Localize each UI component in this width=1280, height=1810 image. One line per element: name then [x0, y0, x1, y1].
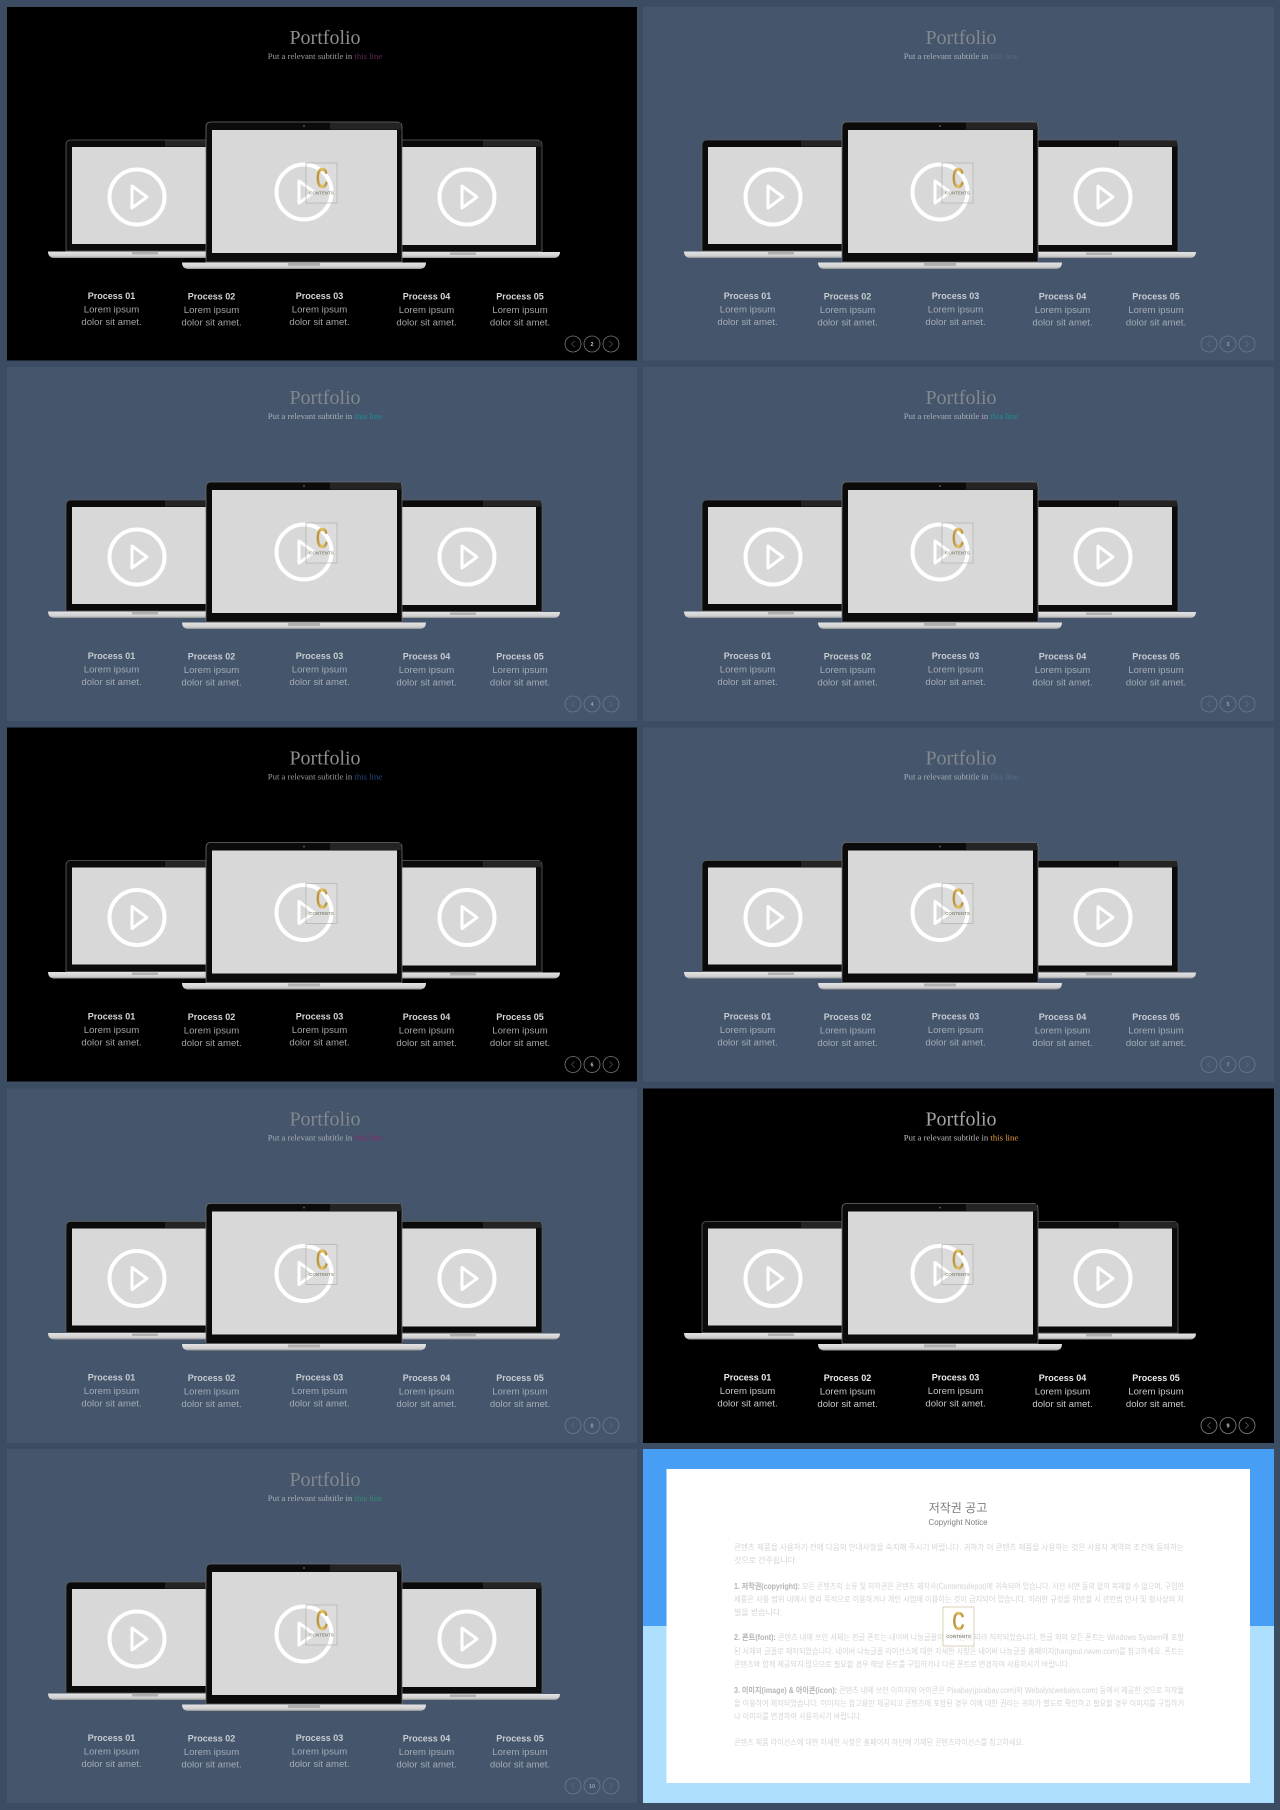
process labels: Lorem ipsum: [84, 1025, 139, 1036]
process labels: dolor sit amet.: [396, 1760, 457, 1770]
panel: slide 10: [7, 1449, 637, 1803]
process labels: Process 05: [496, 292, 544, 302]
subtitle: Put a relevant subtitle in this line: [904, 1132, 1018, 1142]
process labels: dolor sit amet.: [1032, 678, 1093, 688]
process labels: Lorem ipsum: [1035, 1026, 1090, 1036]
copyright body text: 콘텐츠와 함께 제공되지 않으므로 필요할 경우 해당 폰트를 구입하거나 다른 폰트로 변경하여 사용하시기 바랍니다.: [734, 1659, 1070, 1669]
process labels: Process 01: [88, 651, 135, 661]
panel: slide 7: [643, 728, 1274, 1082]
logo watermark: C: [952, 883, 964, 915]
panel: slide 4: [7, 367, 637, 721]
page navigation: [1201, 1056, 1255, 1072]
page navigation: 9: [1226, 1424, 1230, 1430]
process labels: Lorem ipsum: [1128, 1026, 1184, 1036]
logo watermark: [942, 1244, 973, 1284]
process labels: Process 03: [932, 291, 979, 301]
page navigation: 2: [590, 342, 594, 348]
page navigation: 8: [590, 1424, 594, 1430]
process labels: Process 05: [1132, 652, 1180, 662]
process labels: Lorem ipsum: [399, 1386, 454, 1398]
copyright body text: 콘텐츠 제품을 사용하기 전에 다음의 안내사항을 숙지해 주시기 바랍니다. 귀하가 이 콘텐츠 제품을 사용하는 것은 사용자 계약의 조건에 동의하는: [734, 1542, 1184, 1552]
process labels: Process 04: [403, 1012, 450, 1022]
process labels: Process 02: [188, 292, 235, 302]
process labels: Lorem ipsum: [399, 665, 454, 676]
subtitle: Put a relevant subtitle in this line: [268, 1493, 382, 1503]
process labels: Lorem ipsum: [184, 1386, 239, 1398]
logo watermark: [306, 1244, 337, 1284]
process labels: Process 05: [496, 1012, 544, 1022]
process labels: Process 03: [932, 1372, 979, 1382]
copyright heading: 저작권 공고: [929, 1501, 987, 1515]
process labels: Process 01: [724, 291, 771, 301]
subtitle: Put a relevant subtitle in this line: [904, 51, 1018, 61]
process labels: Lorem ipsum: [720, 1386, 775, 1397]
copyright body text: 을 이용하여 제작되었습니다. 이미지는 참고용만 제공되고 콘텐츠에 포함된 경우 이에 대한 권리는 귀하가 별도로 확인하고 필요할 경우 이미지를 구입하거: [734, 1698, 1184, 1708]
process labels: Process 03: [296, 1012, 343, 1022]
process labels: Lorem ipsum: [1128, 1386, 1184, 1398]
process labels: Lorem ipsum: [399, 1747, 454, 1758]
process labels: dolor sit amet.: [817, 318, 878, 328]
copyright body text: 콘텐츠 제품 라이선스에 대한 자세한 사항은 홈페이지 하단에 기재된 콘텐츠라이선스를 참고하세요.: [734, 1737, 1024, 1747]
logo watermark: C: [316, 1604, 328, 1636]
logo watermark: [306, 883, 337, 924]
copyright body text: 1. 저작권(copyright): 모든 콘텐츠의 소유 및 저작권은 콘텐츠 제작사(Contentsdepot)에 귀속되어 있습니다. 사전 서면 동의 없이 복제할 수 없으며, 구입한: [734, 1581, 1185, 1591]
panel: slide 2: [7, 7, 637, 360]
process labels: dolor sit amet.: [1032, 1038, 1093, 1049]
subtitle: Put a relevant subtitle in this line: [904, 411, 1018, 421]
logo watermark: [306, 1604, 337, 1645]
logo watermark: CONTENTS: [946, 1634, 971, 1639]
process labels: dolor sit amet.: [181, 1399, 242, 1410]
process labels: Lorem ipsum: [84, 1386, 139, 1397]
laptops with play icons: [684, 1204, 1196, 1350]
process labels: Process 05: [1132, 1373, 1180, 1383]
process labels: [717, 651, 1186, 688]
process labels: Process 04: [1039, 1373, 1086, 1383]
logo watermark: C: [952, 1244, 964, 1276]
process labels: dolor sit amet.: [1126, 1038, 1186, 1049]
process labels: dolor sit amet.: [490, 1038, 550, 1049]
title: Portfolio: [289, 748, 361, 770]
logo watermark: CONTENTS: [309, 911, 334, 916]
process labels: Lorem ipsum: [820, 1026, 875, 1036]
process labels: dolor sit amet.: [181, 1760, 242, 1770]
title: Portfolio: [925, 387, 997, 409]
process labels: Process 05: [496, 1734, 544, 1744]
process labels: Lorem ipsum: [292, 1746, 347, 1758]
logo watermark: [306, 162, 337, 203]
process labels: dolor sit amet.: [289, 677, 350, 688]
laptops with play icons: [48, 842, 560, 990]
process labels: [81, 1733, 550, 1770]
process labels: Process 03: [296, 651, 343, 661]
process labels: Lorem ipsum: [292, 304, 347, 316]
panel: copyright notice: [643, 1449, 1274, 1803]
process labels: Process 02: [188, 1734, 235, 1744]
process labels: Lorem ipsum: [492, 1747, 548, 1758]
process labels: Lorem ipsum: [399, 305, 454, 316]
process labels: Lorem ipsum: [292, 664, 347, 676]
process labels: Process 05: [496, 1373, 544, 1383]
process labels: Process 02: [824, 652, 871, 662]
process labels: dolor sit amet.: [1126, 318, 1186, 328]
process labels: dolor sit amet.: [396, 318, 457, 328]
process labels: dolor sit amet.: [81, 317, 142, 328]
process labels: Lorem ipsum: [1035, 305, 1090, 316]
logo watermark: C: [316, 883, 328, 915]
copyright body text: 나 이미지를 변경하여 사용하시기 바랍니다.: [734, 1711, 862, 1721]
process labels: Process 02: [188, 1373, 235, 1383]
process labels: Process 03: [932, 651, 979, 661]
page navigation: [565, 1778, 619, 1794]
process labels: dolor sit amet.: [396, 678, 457, 688]
logo watermark: [942, 162, 973, 203]
process labels: Lorem ipsum: [184, 1026, 239, 1036]
logo watermark: C: [316, 1244, 328, 1276]
process labels: Lorem ipsum: [492, 1026, 548, 1036]
subtitle: Put a relevant subtitle in this line: [268, 411, 382, 421]
process labels: dolor sit amet.: [181, 318, 242, 328]
copyright body text: [734, 1542, 1185, 1747]
process labels: Lorem ipsum: [492, 665, 548, 676]
logo watermark: [306, 522, 337, 563]
process labels: Lorem ipsum: [184, 305, 239, 316]
subtitle: Put a relevant subtitle in this line: [268, 772, 382, 782]
process labels: dolor sit amet.: [817, 1399, 878, 1410]
laptops with play icons: [684, 122, 1196, 269]
process labels: dolor sit amet.: [181, 678, 242, 688]
process labels: Process 02: [824, 1373, 871, 1383]
page navigation: [1201, 696, 1255, 712]
page navigation: [1201, 336, 1255, 352]
process labels: Lorem ipsum: [84, 1746, 139, 1758]
process labels: Lorem ipsum: [820, 1386, 875, 1398]
process labels: dolor sit amet.: [490, 678, 550, 688]
process labels: Process 02: [824, 1012, 871, 1022]
process labels: Process 03: [296, 1733, 343, 1743]
process labels: dolor sit amet.: [289, 1398, 350, 1410]
process labels: Process 01: [88, 1012, 135, 1022]
page navigation: 6: [590, 1062, 594, 1068]
process labels: Lorem ipsum: [492, 1386, 548, 1398]
logo watermark: CONTENTS: [945, 911, 970, 916]
logo watermark: CONTENTS: [309, 190, 334, 196]
process labels: Process 01: [88, 1733, 135, 1743]
process labels: Process 05: [496, 652, 544, 662]
process labels: dolor sit amet.: [717, 1038, 778, 1048]
process labels: Lorem ipsum: [399, 1026, 454, 1036]
logo watermark: C: [952, 1606, 965, 1636]
page navigation: 5: [1226, 702, 1230, 708]
process labels: [81, 1012, 550, 1049]
process labels: Process 01: [724, 651, 771, 661]
process labels: Process 01: [724, 1012, 771, 1022]
process labels: dolor sit amet.: [81, 1038, 142, 1048]
process labels: Lorem ipsum: [492, 305, 548, 316]
page navigation: [565, 1418, 619, 1434]
process labels: Lorem ipsum: [84, 664, 139, 676]
title: Portfolio: [289, 387, 361, 409]
page navigation: [565, 1056, 619, 1072]
subtitle: Put a relevant subtitle in this line: [268, 51, 382, 61]
copyright body text: 것으로 간주됩니다.: [734, 1555, 797, 1565]
laptops with play icons: [684, 842, 1196, 990]
process labels: Process 02: [188, 652, 235, 662]
subtitle: Put a relevant subtitle in this line: [268, 1132, 382, 1142]
process labels: Lorem ipsum: [292, 1386, 347, 1397]
logo watermark: [942, 883, 973, 924]
process labels: dolor sit amet.: [925, 1038, 986, 1048]
panel: slide 5: [643, 367, 1274, 721]
process labels: Lorem ipsum: [928, 1025, 983, 1036]
logo watermark: CONTENTS: [945, 550, 970, 556]
process labels: Process 04: [1039, 1012, 1086, 1022]
logo watermark: [943, 1606, 974, 1646]
process labels: Process 03: [296, 1372, 343, 1382]
logo watermark: C: [952, 162, 964, 194]
copyright body text: 2. 폰트(font): 콘텐츠 내에 쓰인 서체는 한글 폰트는 네이버 나눔글꼴의 저작권에 따라 저작되었습니다. 한글 외의 모든 폰트는 Windows System에 포함: [734, 1632, 1185, 1642]
process labels: Process 03: [932, 1012, 979, 1022]
process labels: Lorem ipsum: [928, 1386, 983, 1397]
title: Portfolio: [925, 27, 997, 49]
process labels: Process 01: [88, 1372, 135, 1382]
logo watermark: C: [316, 162, 328, 194]
process labels: Process 01: [88, 291, 135, 301]
process labels: dolor sit amet.: [925, 1398, 986, 1410]
logo watermark: C: [316, 522, 328, 554]
process labels: [717, 291, 1186, 328]
process labels: Lorem ipsum: [292, 1025, 347, 1036]
process labels: Process 04: [1039, 652, 1086, 662]
laptops with play icons: [48, 482, 560, 629]
page navigation: [1201, 1418, 1255, 1434]
title: Portfolio: [925, 748, 997, 770]
process labels: Lorem ipsum: [1128, 305, 1184, 316]
logo watermark: CONTENTS: [945, 190, 970, 196]
process labels: Lorem ipsum: [720, 1025, 775, 1036]
process labels: Lorem ipsum: [184, 1747, 239, 1758]
process labels: dolor sit amet.: [81, 677, 142, 688]
copyright body text: 된 서체와 글꼴로 제작되었습니다. 네이버 나눔글꼴 라이선스에 대한 자세한 사항은 네이버 나눔글꼴 홈페이지(hangeul.naver.com)를 참고하세요. 폰트는: [734, 1646, 1184, 1656]
copyright body text: 벌을 받습니다.: [734, 1607, 783, 1617]
process labels: [717, 1372, 1186, 1410]
process labels: dolor sit amet.: [1032, 318, 1093, 328]
process labels: Lorem ipsum: [820, 665, 875, 676]
process labels: dolor sit amet.: [81, 1759, 142, 1770]
process labels: Process 04: [403, 652, 450, 662]
process labels: dolor sit amet.: [490, 318, 550, 328]
title: Portfolio: [289, 1469, 361, 1491]
logo watermark: C: [952, 522, 964, 554]
page navigation: [565, 336, 619, 352]
panel: slide 9: [643, 1088, 1274, 1443]
page navigation: 4: [590, 702, 594, 708]
process labels: Lorem ipsum: [720, 664, 775, 676]
process labels: dolor sit amet.: [1032, 1399, 1093, 1410]
process labels: dolor sit amet.: [717, 1398, 778, 1410]
copyright body text: 제품은 사용 범위 내에서 영리 목적으로 이용하거나 개인 사업에 이용하는 것이 금지되어 있습니다. 이러한 규정을 위반할 시 관련법 민사 및 형사상의 처: [734, 1594, 1184, 1604]
panel: slide 3: [643, 7, 1274, 360]
process labels: dolor sit amet.: [817, 678, 878, 688]
process labels: Process 02: [824, 292, 871, 302]
process labels: dolor sit amet.: [490, 1399, 550, 1410]
process labels: Lorem ipsum: [1035, 665, 1090, 676]
process labels: dolor sit amet.: [925, 317, 986, 328]
process labels: Lorem ipsum: [84, 304, 139, 316]
page navigation: 3: [1226, 342, 1230, 348]
process labels: dolor sit amet.: [817, 1038, 878, 1049]
laptops with play icons: [684, 482, 1196, 629]
process labels: Process 02: [188, 1012, 235, 1022]
process labels: dolor sit amet.: [396, 1399, 457, 1410]
process labels: dolor sit amet.: [1126, 1399, 1186, 1410]
process labels: Lorem ipsum: [1128, 665, 1184, 676]
logo watermark: CONTENTS: [309, 550, 334, 556]
process labels: Process 03: [296, 291, 343, 301]
logo watermark: [942, 522, 973, 563]
process labels: dolor sit amet.: [925, 677, 986, 688]
process labels: Lorem ipsum: [928, 664, 983, 676]
process labels: dolor sit amet.: [289, 1038, 350, 1048]
process labels: dolor sit amet.: [181, 1038, 242, 1049]
process labels: dolor sit amet.: [490, 1760, 550, 1770]
laptops with play icons: [48, 122, 560, 269]
page navigation: [565, 696, 619, 712]
laptops with play icons: [48, 1564, 560, 1711]
process labels: Process 04: [1039, 292, 1086, 302]
page navigation: 7: [1226, 1062, 1230, 1068]
process labels: dolor sit amet.: [81, 1398, 142, 1410]
process labels: [81, 1372, 550, 1410]
process labels: Lorem ipsum: [1035, 1386, 1090, 1398]
process labels: Lorem ipsum: [820, 305, 875, 316]
panel: slide 6: [7, 728, 637, 1082]
process labels: Process 05: [1132, 292, 1180, 302]
process labels: Lorem ipsum: [720, 304, 775, 316]
process labels: [717, 1012, 1186, 1049]
title: Portfolio: [925, 1108, 997, 1130]
laptops with play icons: [48, 1204, 560, 1350]
process labels: dolor sit amet.: [1126, 678, 1186, 688]
subtitle: Put a relevant subtitle in this line: [904, 772, 1018, 782]
logo watermark: CONTENTS: [309, 1272, 334, 1277]
process labels: dolor sit amet.: [289, 317, 350, 328]
process labels: Process 05: [1132, 1012, 1180, 1022]
process labels: Lorem ipsum: [184, 665, 239, 676]
process labels: Process 04: [403, 292, 450, 302]
process labels: [81, 291, 550, 328]
process labels: Lorem ipsum: [928, 304, 983, 316]
process labels: dolor sit amet.: [289, 1759, 350, 1770]
copyright body text: 3. 이미지(image) & 아이콘(icon): 콘텐츠 내에 쓰인 이미지와 아이콘은 Pixabay(pixabay.com)와 Webalys(webalys.com) 등에서 제공한 것으로 저작물: [734, 1685, 1184, 1695]
logo watermark: CONTENTS: [945, 1272, 970, 1277]
process labels: dolor sit amet.: [717, 677, 778, 688]
logo watermark: CONTENTS: [309, 1632, 334, 1638]
process labels: Process 01: [724, 1372, 771, 1382]
process labels: Process 04: [403, 1734, 450, 1744]
title: Portfolio: [289, 1108, 361, 1130]
process labels: Process 04: [403, 1373, 450, 1383]
copyright subheading: Copyright Notice: [928, 1518, 988, 1527]
process labels: [81, 651, 550, 688]
page navigation: 10: [589, 1784, 595, 1790]
process labels: dolor sit amet.: [717, 317, 778, 328]
process labels: dolor sit amet.: [396, 1038, 457, 1049]
title: Portfolio: [289, 27, 361, 49]
panel: slide 8: [7, 1088, 637, 1443]
